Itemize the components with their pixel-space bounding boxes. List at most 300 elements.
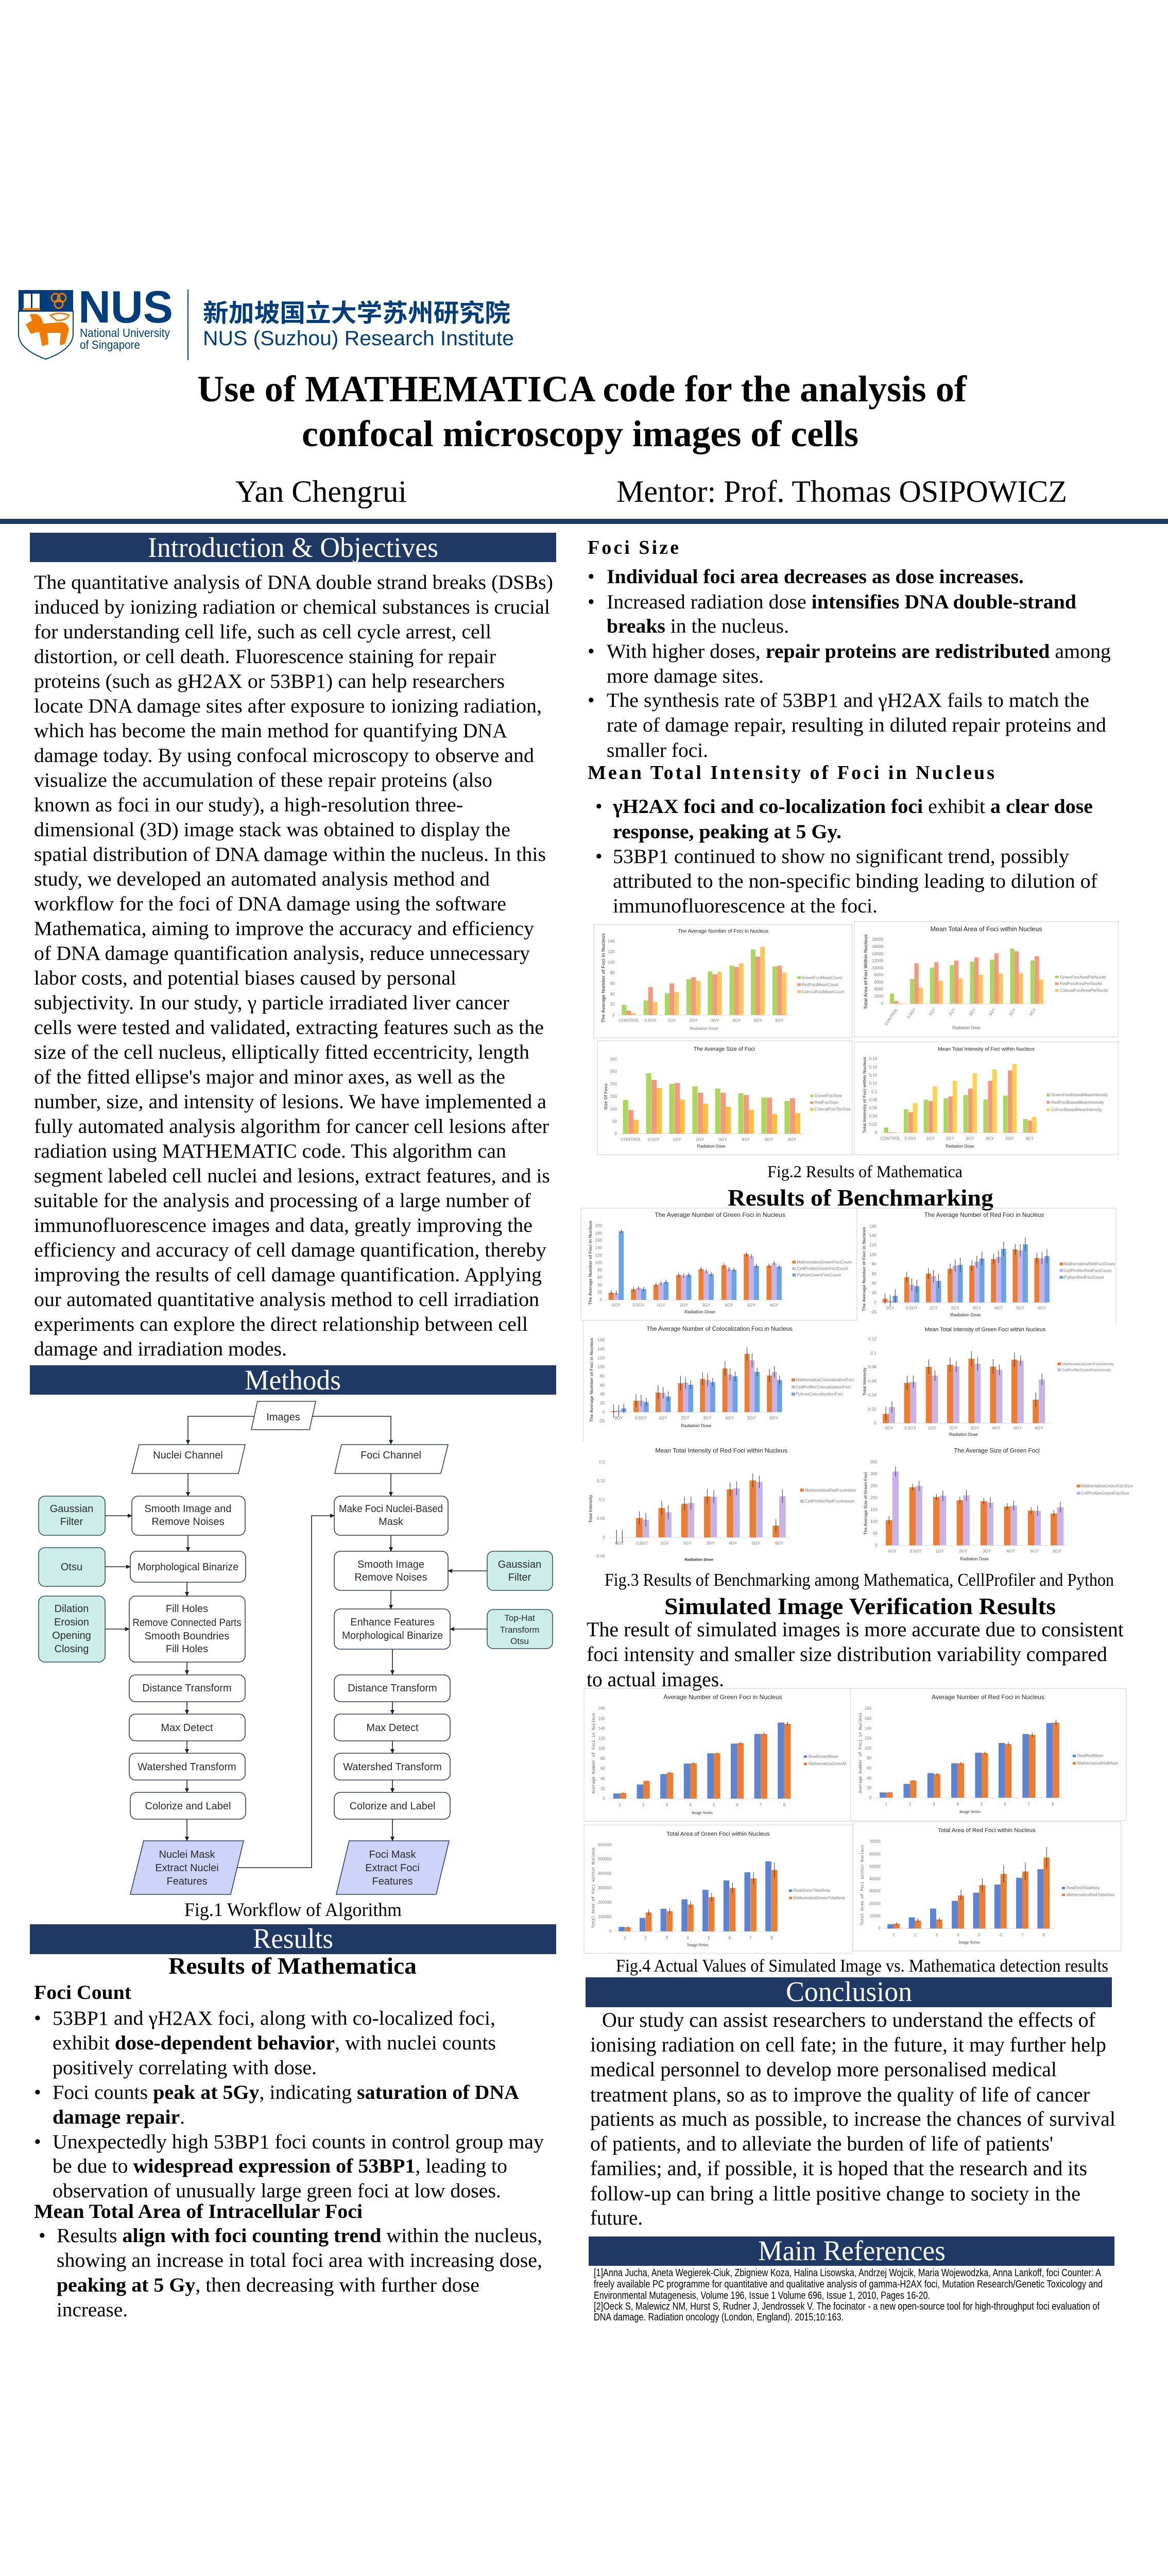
chart: average size of foci: 0.5GY xyxy=(648,1138,660,1142)
text block: conclusion: medical personnel to develop more personalised medical xyxy=(590,2058,1057,2081)
text block: mean total intensity: 53BP1 continued to show no significant trend, possibly xyxy=(613,845,1069,868)
chart: red foci area: 1 xyxy=(892,1933,895,1937)
text block: foci count: Foci Count xyxy=(34,1981,131,2004)
chart: size of green foci: The Average Size of Green Foci xyxy=(864,1472,868,1535)
text block: foci size: • xyxy=(588,689,595,711)
text block: introduction: for understanding cell life, such as cell cycle arrest, cell xyxy=(34,621,491,643)
chart: red foci number: 6 xyxy=(1004,1802,1006,1806)
chart: intensity green foci: 3GY xyxy=(971,1426,979,1430)
caption: fig 2: Fig.2 Results of Mathematica xyxy=(767,1163,963,1181)
chart: intensity red foci: 0GY xyxy=(615,1541,624,1546)
panel: conclusion heading: Conclusion xyxy=(786,1976,912,2007)
chart: green foci count: 120 xyxy=(595,1253,603,1258)
legend: CellProfilerGreenFociIntensity xyxy=(1062,1368,1111,1372)
legend xyxy=(800,1488,856,1503)
chart: mean total area of foci xyxy=(854,922,1118,1037)
text block: mean total area: showing an increase in total foci area with increasing dose, xyxy=(57,2249,542,2272)
chart: mean total intensity of foci: 3GY xyxy=(966,1137,974,1141)
text block: foci size: • xyxy=(588,640,595,663)
chart: intensity red foci: 0.2 xyxy=(599,1460,605,1464)
chart: mean total intensity of foci: 4GY xyxy=(986,1137,994,1141)
chart: average size of foci: 3GY xyxy=(719,1138,727,1142)
text block: introduction: experiments can explore the direct relationship between cell xyxy=(34,1313,528,1335)
text block: mean total area: • xyxy=(39,2225,46,2247)
chart: mean total intensity of foci: 0.1 xyxy=(871,1089,878,1094)
chart: mean total area of foci: 8000 xyxy=(874,973,884,977)
legend: ColocalFociTocSize xyxy=(815,1107,851,1112)
title: confocal microscopy images of cells xyxy=(302,413,858,454)
legend: PythonColocalizationFoci xyxy=(796,1392,843,1397)
caption: fig 1: Fig.1 Workflow of Algorithm xyxy=(184,1900,402,1921)
panel: references heading: Main References xyxy=(758,2235,946,2266)
flow: foci channel: Foci Channel xyxy=(360,1450,421,1461)
legend: ColocalFociMeanCount xyxy=(802,990,845,994)
flow: nuclei channel xyxy=(132,1445,245,1473)
title: Use of MATHEMATICA code for the analysis of xyxy=(197,368,967,410)
flow: foci distance transform xyxy=(334,1675,450,1702)
flow: nuclei mask: Extract Nuclei xyxy=(155,1862,219,1874)
chart: mean total area of foci: 0 xyxy=(881,1002,884,1006)
chart: red foci area: 10000 xyxy=(869,1913,881,1918)
flow: gaussian filter left: Gaussian xyxy=(50,1503,93,1515)
text block: introduction: visualize the accumulation of these repair proteins (also xyxy=(34,769,492,791)
chart: green foci count: 1GY xyxy=(657,1303,665,1308)
chart: mean total area of foci: CONTROL xyxy=(884,1007,899,1026)
panel: methods heading xyxy=(30,1364,556,1396)
text block: foci count: • xyxy=(34,2081,41,2104)
chart: average number of foci: 4GY xyxy=(732,1018,741,1023)
chart: intensity green foci: 0GY xyxy=(885,1426,894,1430)
logo: NUS Suzhou Research Institute xyxy=(19,281,514,360)
flow: foci smooth: Remove Noises xyxy=(354,1572,427,1583)
legend: RedFociAreaPerNuclei xyxy=(1060,981,1102,986)
chart: intensity green foci: 6GY xyxy=(1035,1426,1043,1430)
chart: average number of foci: 6GY xyxy=(776,1018,784,1023)
text block: mean total intensity: attributed to the non-specific binding leading to dilution of xyxy=(613,870,1097,892)
flow: colorize: Colorize and Label xyxy=(145,1801,231,1812)
chart: green foci area: 2 xyxy=(645,1936,647,1940)
chart: red foci area: 7 xyxy=(1021,1933,1024,1937)
chart: green foci area: 4 xyxy=(686,1936,689,1940)
chart: mean total intensity of foci: 1GY xyxy=(926,1137,935,1141)
panel: results heading xyxy=(30,1923,556,1954)
chart: intensity green foci: 5GY xyxy=(1014,1426,1022,1430)
chart: green foci area: 300000 xyxy=(598,1886,612,1890)
text block: foci size: • xyxy=(588,566,595,588)
text block: mean total area: Results align with foci counting trend within the nucleus, xyxy=(57,2225,542,2247)
chart: average size of foci: 1GY xyxy=(673,1138,681,1142)
chart: red foci count: Radiation Dose xyxy=(951,1312,981,1317)
chart: green foci count: Radiation Dose xyxy=(684,1309,715,1314)
chart: average size of foci: 200 xyxy=(610,1082,617,1087)
legend xyxy=(1073,1754,1118,1766)
chart: average size of foci: CONTROL xyxy=(621,1138,641,1142)
text block: introduction: fully automated analysis algorithm for cancer cell lesions after xyxy=(34,1115,549,1138)
chart: red foci area: 50000 xyxy=(869,1864,881,1869)
text block: introduction: suitable for the analysis and processing of a large number of xyxy=(34,1190,531,1212)
text block: foci count: 53BP1 and γH2AX foci, along with co-localized foci, xyxy=(53,2007,495,2029)
chart: green foci area: 3 xyxy=(666,1936,668,1940)
chart: mean total area of foci: 3GY xyxy=(968,1007,977,1016)
chart: size of green foci: 0GY xyxy=(888,1549,897,1553)
legend xyxy=(1057,1362,1114,1372)
chart: average size of foci: 5GY xyxy=(765,1138,774,1142)
university name xyxy=(80,326,170,351)
chart: mean total area of foci: 14000 xyxy=(872,952,884,956)
chart: mean total intensity of foci: 5GY xyxy=(1006,1137,1014,1141)
chart: green foci area: Total Area of Green Foci within Nucleus xyxy=(666,1831,770,1837)
text block: introduction: proteins (such as gH2AX or 53BP1) can help researchers xyxy=(34,670,505,692)
chart: green foci number: 0 xyxy=(603,1796,605,1801)
legend: MathematicaRedFociCount xyxy=(1064,1262,1115,1266)
chart: red foci area xyxy=(852,1822,1121,1951)
figure 4: simulated image charts xyxy=(584,1688,1126,1953)
chart: average number of foci: 2GY xyxy=(690,1018,698,1023)
chart: size of green foci: 1GY xyxy=(935,1549,944,1553)
text block: introduction: The quantitative analysis of DNA double strand breaks (DSBs) xyxy=(34,571,553,594)
text block: references: Environmental Mutagenesis, Volume 196, Issue 1 Volume 696, Issue 1, 2010, Pages 16-20. xyxy=(594,2290,930,2301)
chart: size of green foci: 100 xyxy=(870,1519,878,1524)
legend: GreenFociMeanCount xyxy=(802,975,843,980)
heading: results of mathematica: Results of Mathematica xyxy=(168,1953,417,1979)
text block: introduction: size of the cell nucleus, elliptically fitted eccentricity, length xyxy=(34,1041,529,1063)
chart: size of green foci xyxy=(864,1447,1133,1562)
chart: average size of foci: Radiation Dose xyxy=(697,1144,726,1149)
flow: foci mask creation: Make Foci Nuclei-Based xyxy=(339,1503,443,1515)
chart: green foci area: 0 xyxy=(609,1929,612,1934)
chart: intensity red foci: 4GY xyxy=(729,1541,737,1546)
chart: average number of foci: 0.5GY xyxy=(645,1018,657,1023)
flow: gaussian filter right xyxy=(487,1551,553,1590)
chart: red foci area: Image Series xyxy=(959,1940,980,1944)
flow: foci distance transform: Distance Transform xyxy=(348,1683,437,1694)
chart: red foci count: 0GY xyxy=(886,1306,895,1310)
legend: CellProfilerGreenFociCount xyxy=(797,1266,849,1271)
chart: average number of foci: 40 xyxy=(610,992,615,996)
chart: mean total area of foci: 5GY xyxy=(1008,1007,1017,1016)
chart: red foci number: Average Number of Foci in Nucleus xyxy=(858,1713,863,1793)
text block: foci count: exhibit dose-dependent behavior , with nuclei counts xyxy=(53,2032,496,2054)
chart: red foci number: 3 xyxy=(933,1802,935,1806)
chart: mean total intensity of foci: 0.06 xyxy=(869,1106,878,1110)
flow: foci mask: Extract Foci xyxy=(365,1862,420,1874)
flow: dilation xyxy=(39,1596,105,1662)
text block: foci size: Individual foci area decreases as dose increases. xyxy=(607,566,1024,588)
chart: red foci number: 160 xyxy=(865,1716,872,1721)
chart: intensity red foci: 0.15 xyxy=(597,1479,605,1483)
chart: green foci count: 3GY xyxy=(702,1303,711,1308)
text block: foci count: positively correlating with dose. xyxy=(53,2057,317,2079)
chart: average number of foci: 0 xyxy=(612,1013,615,1018)
caption: fig 3: Fig.3 Results of Benchmarking among Mathematica, CellProfiler and Python xyxy=(605,1570,1114,1590)
chart: red foci number: Average Number of Red Foci in Nucleus xyxy=(932,1693,1044,1701)
chart: green foci number: 40 xyxy=(600,1776,605,1781)
chart: average number of foci: 5GY xyxy=(754,1018,762,1023)
flow: top-hat: Top-Hat xyxy=(504,1613,535,1623)
flow: gaussian filter left xyxy=(39,1496,105,1535)
chart: mean total intensity of foci: 6GY xyxy=(1025,1137,1034,1141)
chart: colocalization foci count: 0GY xyxy=(614,1416,623,1420)
chart: average size of foci: 100 xyxy=(610,1107,617,1111)
text block: introduction: of DNA damage quantification analysis, reduce unnecessary xyxy=(34,942,530,964)
chart: mean total intensity of foci: 0.04 xyxy=(869,1114,878,1118)
chart: intensity red foci: 6GY xyxy=(775,1541,784,1546)
chart: average number of foci: 1GY xyxy=(668,1018,676,1023)
flow: foci max detect xyxy=(334,1714,450,1741)
text block: mean total area: Mean Total Area of Intracellular Foci xyxy=(34,2200,363,2223)
chart: intensity green foci: 0.12 xyxy=(868,1337,877,1342)
chart: red foci count: 20 xyxy=(872,1291,877,1295)
chart: size of green foci: 3GY xyxy=(983,1549,991,1553)
legend: PythonGreenFociCount xyxy=(797,1273,841,1278)
legend: RealGreenMean xyxy=(809,1754,838,1759)
chart: green foci area: 500000 xyxy=(598,1857,612,1861)
legend: RealGreenTotalArea xyxy=(793,1888,830,1893)
text block: introduction: radiation using MATHEMATIC code. This algorithm can xyxy=(34,1140,506,1162)
chart: green foci number: 80 xyxy=(600,1756,605,1761)
text block: references xyxy=(594,2267,1103,2323)
chart: intensity red foci xyxy=(588,1447,856,1562)
chart: colocalization foci count: 160 xyxy=(597,1338,605,1343)
flow: foci channel xyxy=(335,1445,448,1473)
text block: mean total intensity: • xyxy=(595,845,603,868)
chart: mean total area of foci: Total Area of Foci Within Nucleus xyxy=(863,935,868,1009)
legend: MathematicaGreenFociCount xyxy=(797,1260,852,1265)
legend: CellProfilerRedFociIntensit xyxy=(805,1499,855,1503)
chart: red foci number: 0 xyxy=(869,1795,872,1800)
text block: foci size: With higher doses, repair proteins are redistributed among xyxy=(607,640,1111,663)
figure 2: results of mathematica charts xyxy=(594,922,1118,1155)
flow: distance transform xyxy=(129,1675,245,1702)
chart: red foci number: 20 xyxy=(867,1786,872,1790)
chart: average size of foci: 50 xyxy=(612,1119,617,1124)
panel: conclusion heading xyxy=(586,1976,1112,2007)
chart: size of green foci: Radiation Dose xyxy=(960,1557,989,1562)
authors xyxy=(235,474,1067,509)
chart: red foci count: 3GY xyxy=(973,1306,982,1310)
chart: colocalization foci count: Radiation Dose xyxy=(681,1423,711,1428)
chart: green foci count: The Average Number of Foci in Nucleus xyxy=(588,1221,593,1305)
chart: red foci number: 40 xyxy=(867,1776,872,1781)
authors: Yan Chengrui xyxy=(235,474,407,509)
chart: average number of foci: 60 xyxy=(610,981,615,986)
text block: mean total intensity: Mean Total Intensity of Foci in Nucleus xyxy=(588,762,994,784)
chart: red foci number xyxy=(850,1688,1126,1821)
caption: fig 4: Fig.4 Actual Values of Simulated Image vs. Mathematica detection results xyxy=(616,1956,1108,1976)
chart: average number of foci: Radiation Dose xyxy=(690,1026,718,1031)
chart: colocalization foci count: 80 xyxy=(600,1374,605,1378)
flow: fill holes: Smooth Boundries xyxy=(145,1631,229,1642)
flow: otsu: Otsu xyxy=(61,1562,82,1573)
chart: average number of foci: 120 xyxy=(608,950,615,954)
chart: red foci area: 20000 xyxy=(869,1901,881,1906)
chart: green foci number: Average Number of Green Foci in Nucleus xyxy=(663,1693,782,1701)
flow: dilation: Closing xyxy=(55,1643,89,1655)
chart: red foci count: 80 xyxy=(872,1262,877,1266)
text block: introduction: induced by ionizing radiation or chemical substances is crucial xyxy=(34,596,550,618)
chart: green foci number: 2 xyxy=(642,1803,644,1807)
chart: green foci count: 60 xyxy=(597,1275,603,1280)
chart: red foci number: 2 xyxy=(909,1802,911,1806)
chart: red foci number: 5 xyxy=(981,1802,983,1806)
chart: green foci area: 5 xyxy=(708,1936,710,1940)
chart: green foci number: 8 xyxy=(783,1803,786,1807)
chart: red foci number: 80 xyxy=(867,1756,872,1760)
legend: RealRedMean xyxy=(1077,1754,1103,1758)
flow: foci mask: Foci Mask xyxy=(369,1849,417,1860)
chart: green foci number: 20 xyxy=(600,1786,605,1791)
icon: NUS crest xyxy=(19,290,73,359)
chart: size of green foci: 50 xyxy=(873,1531,878,1536)
text block: introduction: damage today. By using confocal microscopy to observe and xyxy=(34,744,535,767)
chart: green foci number: 4 xyxy=(689,1803,692,1807)
text block: foci size: rate of damage repair, resulting in diluted repair proteins and xyxy=(607,714,1107,736)
chart: average number of foci: The Average Number of Foci In Nucleus xyxy=(601,934,606,1023)
flow: nuclei mask xyxy=(130,1841,244,1894)
chart: average number of foci: 3GY xyxy=(711,1018,719,1023)
legend xyxy=(1060,1262,1115,1280)
flow: foci max detect: Max Detect xyxy=(366,1722,419,1734)
chart: red foci number: 100 xyxy=(865,1746,872,1751)
flow: max detect: Max Detect xyxy=(161,1722,213,1734)
chart: mean total intensity of foci: 0.12 xyxy=(869,1081,878,1086)
chart: red foci area: 5 xyxy=(978,1933,981,1937)
chart: intensity green foci: 0 xyxy=(874,1421,877,1426)
text block: foci count: Foci counts peak at 5Gy, indicating saturation of DNA xyxy=(53,2081,519,2104)
chart: intensity red foci: 0.05 xyxy=(597,1516,605,1521)
text block: foci count: observation of unusually large green foci at low doses. xyxy=(53,2180,501,2202)
chart: green foci count: 4GY xyxy=(725,1303,733,1308)
text block: introduction: efficiency and accuracy of cell damage quantification, thereby xyxy=(34,1239,546,1261)
chart: green foci count: 2GY xyxy=(680,1303,688,1308)
chart: average size of foci: The Average Size of Foci xyxy=(694,1046,755,1052)
text block: simulated results: to actual images. xyxy=(587,1668,724,1691)
chart: intensity green foci: Mean Total Intensity of Green Foci within Nucleus xyxy=(925,1327,1045,1333)
chart: mean total intensity of foci: Radiation Dose xyxy=(946,1144,974,1148)
flow: nuclei smooth: Smooth Image and xyxy=(144,1503,232,1515)
chart: average number of foci: 140 xyxy=(608,939,615,944)
chart: red foci count: The Average Number of Red Foci in Nucleus xyxy=(924,1212,1044,1218)
chart: size of green foci: 4GY xyxy=(1006,1549,1015,1553)
flow: colorize xyxy=(130,1792,246,1819)
chart: green foci number: 60 xyxy=(600,1766,605,1771)
text block: conclusion xyxy=(590,2008,1115,2229)
chart: red foci number: Image Series xyxy=(959,1809,981,1814)
chart: mean total intensity of foci: Mean Total Intensity of Foci within Nucleus xyxy=(938,1046,1035,1052)
text block: foci size: smaller foci. xyxy=(607,739,708,761)
chart: green foci number: 160 xyxy=(598,1716,605,1721)
chart: red foci area: 2 xyxy=(914,1933,916,1937)
chart: mean total intensity of foci: 0.14 xyxy=(869,1073,878,1078)
chart: mean total area of foci: 6000 xyxy=(874,980,884,985)
text block: foci count: • xyxy=(34,2131,41,2153)
chart: colocalization foci count: 3GY xyxy=(703,1416,712,1420)
chart: intensity red foci: -0.05 xyxy=(595,1554,605,1558)
chart: mean total intensity of foci: 0.18 xyxy=(869,1057,878,1061)
chart: red foci count: 5GY xyxy=(1016,1306,1025,1310)
chart: mean total area of foci: 0.5GY xyxy=(906,1007,917,1020)
flow: fill holes: Remove Connected Parts xyxy=(133,1617,241,1629)
legend: RedFociSize xyxy=(815,1100,838,1105)
chart: green foci number: 180 xyxy=(598,1706,605,1711)
chart: green foci count: 5GY xyxy=(747,1303,756,1308)
chart: red foci count: 2GY xyxy=(951,1306,960,1310)
university name: of Singapore xyxy=(80,338,140,351)
chart: green foci count: 160 xyxy=(595,1238,603,1243)
chart: intensity green foci: 0.02 xyxy=(868,1407,877,1412)
legend xyxy=(1046,1093,1108,1112)
chart: red foci area: 60000 xyxy=(869,1852,881,1856)
chart: red foci count: 0.5GY xyxy=(906,1306,918,1310)
university name: National University xyxy=(80,326,170,340)
chart: size of green foci: The Average Size of Green Foci xyxy=(954,1447,1040,1454)
flow: fill holes: Fill Holes xyxy=(166,1603,208,1615)
chart: red foci count: The Average Number of Foci in Nucleus xyxy=(862,1227,867,1311)
flow: top-hat: Otsu xyxy=(510,1636,529,1646)
chart: intensity red foci: 0.5GY xyxy=(636,1541,648,1546)
text block: foci size: The synthesis rate of 53BP1 and γH2AX fails to match the xyxy=(607,689,1089,711)
chart: green foci number: 3 xyxy=(666,1803,668,1807)
flow: distance transform: Distance Transform xyxy=(142,1683,232,1694)
text block: mean total intensity xyxy=(588,762,1097,917)
chart: red foci area: 70000 xyxy=(869,1839,881,1844)
legend: ColocalFociAreaPerNuclei xyxy=(1060,988,1108,993)
chart: green foci area: Image Series xyxy=(688,1943,709,1947)
chart: colocalization foci count: 4GY xyxy=(726,1416,734,1420)
chart: mean total intensity of foci: 2GY xyxy=(946,1137,955,1141)
chart: size of green foci: 5GY xyxy=(1030,1549,1039,1553)
legend: GreenFociSize xyxy=(815,1094,842,1098)
flow: enhance features xyxy=(334,1609,450,1649)
text block: mean total area: peaking at 5 Gy, then decreasing with further dose xyxy=(57,2274,479,2296)
chart: average size of foci: 250 xyxy=(610,1070,617,1074)
institute name English: NUS (Suzhou) Research Institute xyxy=(203,327,514,350)
chart: green foci count: 0GY xyxy=(612,1303,621,1308)
legend: CellProfilerColocalizationFoci xyxy=(796,1385,851,1389)
chart: red foci count: 60 xyxy=(872,1272,877,1276)
text block: introduction: subjectivity. In our study, γ particle irradiated liver cancer xyxy=(34,992,509,1014)
text block: introduction: Mathematica, aiming to improve the accuracy and efficiency xyxy=(34,918,535,940)
chart: intensity green foci: 0.06 xyxy=(868,1379,877,1384)
text block: mean total intensity: γH2AX foci and co-localization foci exhibit a clear dose xyxy=(612,795,1093,818)
chart: colocalization foci count: 120 xyxy=(597,1355,605,1360)
chart: green foci count: 20 xyxy=(597,1290,603,1295)
chart: red foci number: 8 xyxy=(1052,1802,1054,1806)
chart: red foci count: -20 xyxy=(870,1310,877,1314)
chart: green foci count: 180 xyxy=(595,1231,603,1235)
flow: fill holes: Fill Holes xyxy=(166,1643,208,1655)
legend xyxy=(797,975,845,994)
flow: fill holes xyxy=(129,1596,245,1662)
heading: results of benchmarking: Results of Benchmarking xyxy=(728,1184,993,1211)
text block: conclusion: treatment plans, so as to improve the quality of life of cancer xyxy=(590,2083,1090,2106)
legend: RedFociMeanCount xyxy=(802,982,839,987)
chart: red foci area: 8 xyxy=(1043,1933,1045,1937)
text block: foci count: • xyxy=(34,2007,41,2029)
text block: introduction: workflow for the foci of DNA damage using the software xyxy=(34,893,506,915)
legend xyxy=(789,1888,845,1900)
chart: mean total intensity of foci: 0.16 xyxy=(869,1065,878,1070)
chart: red foci area: 30000 xyxy=(869,1889,881,1893)
chart: red foci area: 4 xyxy=(957,1933,959,1937)
legend xyxy=(1077,1484,1133,1496)
panel: introduction heading xyxy=(30,532,556,563)
chart: size of green foci: 0 xyxy=(875,1543,878,1548)
legend: RedFociBasedMeanIntensity xyxy=(1051,1100,1104,1105)
panel: references heading xyxy=(589,2235,1114,2266)
legend xyxy=(792,1378,854,1397)
text block: foci size: • xyxy=(588,591,595,613)
